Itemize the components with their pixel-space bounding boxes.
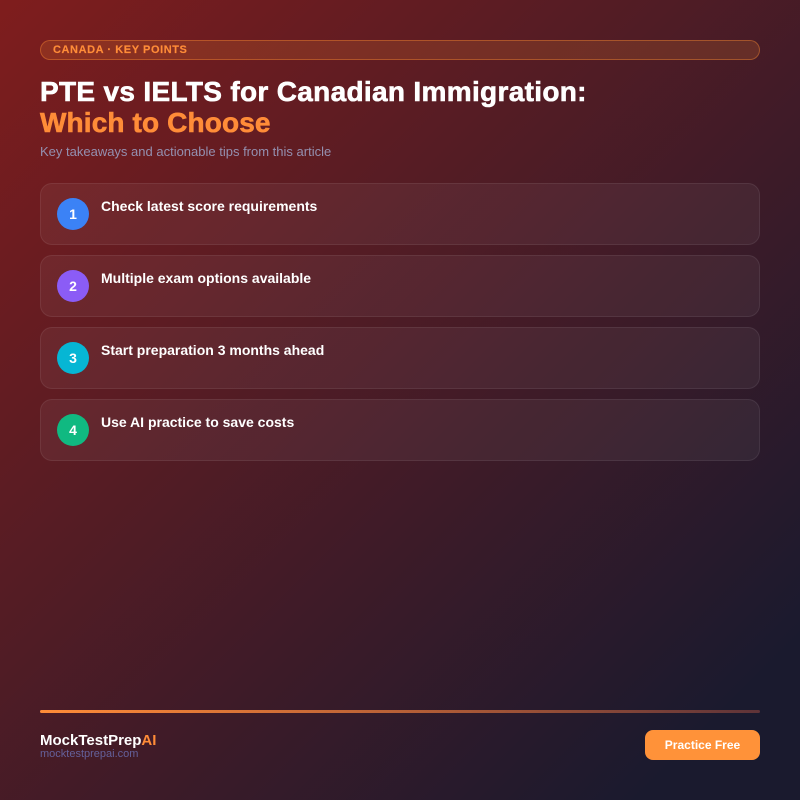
button: practice free — [645, 730, 760, 760]
badge: canada key points — [40, 40, 760, 60]
panel: key point 3 — [40, 327, 760, 389]
brand name: MockTestPrepAI — [40, 732, 156, 749]
button: practice free: Practice Free — [665, 738, 740, 752]
icon: number 1: 1 — [69, 206, 77, 222]
text: key point 3: Start preparation 3 months ahead — [101, 342, 324, 358]
panel: key point 4 — [40, 399, 760, 461]
brand url: mocktestprepai.com — [40, 748, 138, 760]
icon: number 4 — [57, 414, 89, 446]
title: Which to Choose — [40, 107, 271, 138]
text: key point 1: Check latest score requirements — [101, 198, 317, 214]
subtitle: Key takeaways and actionable tips from this article — [40, 144, 331, 159]
icon: number 4: 4 — [69, 422, 77, 438]
panel: key point 2 — [40, 255, 760, 317]
icon: number 3: 3 — [69, 350, 77, 366]
icon: number 1 — [57, 198, 89, 230]
text: key point 2: Multiple exam options available — [101, 270, 311, 286]
badge: canada key points: CANADA · KEY POINTS — [53, 44, 187, 56]
title — [40, 76, 587, 138]
icon: number 2: 2 — [69, 278, 77, 294]
panel: key point 1 — [40, 183, 760, 245]
title: PTE vs IELTS for Canadian Immigration: — [40, 76, 587, 107]
text: key point 4: Use AI practice to save costs — [101, 414, 294, 430]
icon: number 2 — [57, 270, 89, 302]
icon: number 3 — [57, 342, 89, 374]
footer accent rule — [40, 710, 760, 713]
